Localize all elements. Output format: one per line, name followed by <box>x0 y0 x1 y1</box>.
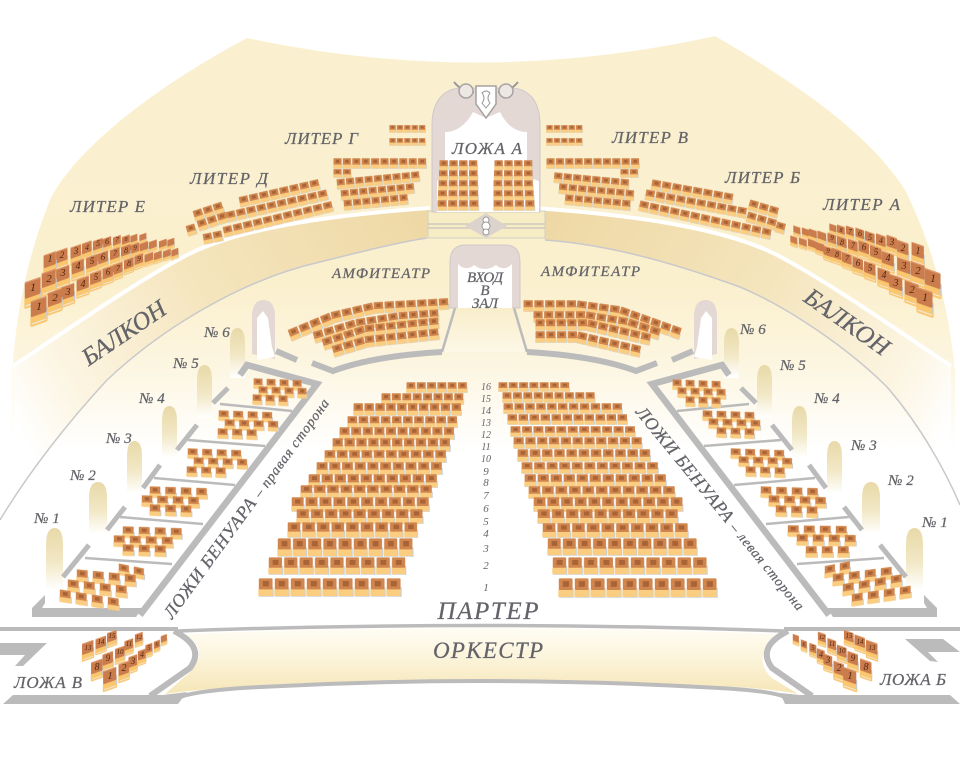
Liter E seat numbers: 6 <box>101 252 106 262</box>
box V seat numbers: 6 <box>156 642 158 648</box>
box V seat numbers: 10 <box>116 648 124 656</box>
Liter A seat numbers: 2 <box>909 284 915 296</box>
label: balcony right: БАЛКОН <box>798 283 896 363</box>
label: box V: ЛОЖА В <box>13 673 83 692</box>
box B seat numbers: 1 <box>847 670 853 682</box>
Liter A seat numbers: 4 <box>882 270 886 281</box>
box V seat numbers: 4 <box>140 650 144 659</box>
Liter E seat numbers: 7 <box>115 236 119 244</box>
benoir box seats left <box>59 378 310 612</box>
main cream hall background <box>12 36 955 450</box>
Liter A seat numbers: 7 <box>848 228 852 236</box>
Liter E seat numbers: 7 <box>116 264 121 273</box>
parterre row numbers: 7 <box>483 490 489 502</box>
box numbers right <box>739 322 948 531</box>
box A seats <box>437 160 535 211</box>
Liter E seat numbers: 3 <box>73 246 79 256</box>
box B seat numbers: 10 <box>838 647 846 655</box>
balcony band left <box>13 208 430 490</box>
Liter E seat numbers: 6 <box>106 267 111 277</box>
label: entrance: В <box>480 283 490 299</box>
Liter E seat numbers: 8 <box>124 246 128 255</box>
parterre row numbers: 11 <box>481 442 491 453</box>
amphitheatre seats right <box>523 300 683 358</box>
label: entrance: ВХОД <box>467 270 504 286</box>
box numbers right: № 5 <box>779 358 806 374</box>
Liter E seat numbers: 5 <box>96 239 100 248</box>
box B seat numbers: 15 <box>846 632 853 640</box>
Liter A seat numbers: 6 <box>862 242 867 252</box>
parterre row numbers: 5 <box>483 516 489 528</box>
ornamental panel <box>428 211 545 238</box>
balcony inner arc left <box>0 238 427 520</box>
label: balcony left: БАЛКОН <box>76 294 173 372</box>
Liter A seat numbers: 8 <box>835 250 839 259</box>
parterre row numbers: 8 <box>483 477 489 489</box>
Liter E seat numbers: 6 <box>105 237 109 246</box>
label: Liter G: ЛИТЕР Г <box>284 129 359 148</box>
Liter E seat numbers: 5 <box>94 272 99 282</box>
label: entrance <box>467 270 504 312</box>
parterre row numbers: 1 <box>483 582 489 594</box>
Liter A seat numbers <box>826 228 936 304</box>
Liter E seat numbers: 2 <box>46 273 52 285</box>
benoir box seats right <box>672 379 915 607</box>
box numbers left: № 2 <box>69 468 96 484</box>
box B seat numbers: 8 <box>864 662 868 673</box>
label: orchestra: ОРКЕСТР <box>433 638 543 663</box>
box B frame <box>767 629 960 704</box>
label: box B: ЛОЖА Б <box>879 670 946 689</box>
upper tier seats: Liter V <box>546 125 640 211</box>
box B seat numbers: 12 <box>819 635 825 641</box>
Liter A seat numbers: 3 <box>889 237 895 247</box>
box numbers right: № 4 <box>813 391 840 407</box>
upper tier seats: Liter G <box>333 125 427 211</box>
Liter A seat numbers: 6 <box>858 229 862 238</box>
Liter A seat numbers: 7 <box>851 241 856 250</box>
orchestra pit <box>165 626 798 697</box>
Liter A seats <box>790 223 942 319</box>
Liter A seat numbers: 1 <box>916 246 920 257</box>
Liter E seat numbers: 1 <box>30 280 36 294</box>
Liter E seats <box>24 232 179 328</box>
box V seat numbers: 8 <box>94 662 100 673</box>
balcony white rail left <box>13 208 430 366</box>
label: benoir boxes left-hand side: ЛОЖИ БЕНУАРА – левая сторона <box>631 401 810 614</box>
Liter A seat numbers: 5 <box>868 263 873 273</box>
ornament: box A crest <box>454 82 518 118</box>
parterre seats right <box>498 382 718 598</box>
box numbers right: № 3 <box>850 438 877 454</box>
Liter E seat numbers: 2 <box>52 292 58 304</box>
box numbers left: № 5 <box>172 356 199 372</box>
box B seat numbers: 6 <box>802 642 806 648</box>
Liter E seat numbers: 8 <box>127 259 131 268</box>
grey walls and box pillars, left side <box>32 300 455 617</box>
Liter A seat numbers: 8 <box>840 228 842 234</box>
box V frame <box>0 629 195 704</box>
Liter A seat numbers: 1 <box>922 290 928 304</box>
box numbers left: № 1 <box>33 511 60 527</box>
Liter E seat numbers: 3 <box>60 268 66 279</box>
Liter E seat numbers: 2 <box>60 250 65 260</box>
box numbers left <box>33 325 230 527</box>
box V seat numbers: 14 <box>98 638 105 646</box>
box V seats <box>82 629 168 693</box>
Liter A seat numbers: 9 <box>826 247 830 255</box>
box V seat numbers: 12 <box>136 635 142 641</box>
label: Liter D: ЛИТЕР Д <box>189 169 269 188</box>
Liter A seat numbers: 4 <box>879 236 883 245</box>
Liter A seat numbers: 3 <box>900 261 906 272</box>
Liter E seat numbers: 4 <box>80 279 86 290</box>
label: benoir boxes right-hand side: ЛОЖИ БЕНУАРА – правая сторона <box>159 394 333 623</box>
box V seat numbers: 3 <box>130 656 136 666</box>
Liter E seat numbers: 3 <box>64 287 70 298</box>
label: Liter V: ЛИТЕР В <box>611 128 689 147</box>
box B seat numbers: 9 <box>851 653 856 663</box>
parterre row numbers: 13 <box>481 418 491 429</box>
box V seat numbers: 15 <box>108 632 116 640</box>
parterre row numbers: 2 <box>483 560 489 572</box>
label: box A: ЛОЖА А <box>451 139 523 158</box>
box V seat numbers: 13 <box>84 644 92 652</box>
wall strips <box>63 388 228 577</box>
balcony inner arc right <box>545 240 960 505</box>
box B seat numbers: 4 <box>819 650 823 659</box>
small arch <box>252 300 275 359</box>
box B seat numbers <box>802 632 876 682</box>
Liter A seat numbers: 6 <box>856 258 861 268</box>
label: parterre: ПАРТЕР <box>436 598 538 625</box>
parterre row numbers <box>481 382 491 594</box>
box numbers left: № 4 <box>138 391 165 407</box>
Liter A seat numbers: 1 <box>930 271 936 285</box>
box B seats <box>792 629 878 693</box>
Liter E seat numbers: 7 <box>113 249 118 258</box>
label: amphitheatre right: АМФИТЕАТР <box>540 264 640 280</box>
box V seat numbers: 1 <box>107 670 113 682</box>
box numbers left: № 6 <box>203 325 230 341</box>
Liter E seat numbers: 4 <box>76 261 80 272</box>
Liter A seat numbers: 9 <box>830 234 834 242</box>
box numbers left: № 3 <box>105 431 132 447</box>
label: Liter A: ЛИТЕР А <box>822 195 901 214</box>
box numbers right: № 2 <box>887 473 914 489</box>
Liter E seat numbers: 1 <box>48 254 52 265</box>
box V seat numbers: 9 <box>106 653 111 663</box>
Liter E seat numbers: 1 <box>36 299 42 313</box>
entrance arch <box>442 245 527 352</box>
box B seat numbers: 5 <box>811 644 815 652</box>
label: Liter E: ЛИТЕР Е <box>69 197 146 216</box>
Liter E seat numbers: 9 <box>133 244 137 252</box>
Liter E seat numbers: 8 <box>124 237 128 243</box>
parterre row numbers: 15 <box>481 394 491 405</box>
amphitheatre seats left <box>287 298 450 358</box>
upper tier seats: Liter B <box>638 179 787 240</box>
balcony white rail right <box>534 208 951 366</box>
box B seat numbers: 13 <box>868 644 876 652</box>
box numbers right: № 6 <box>739 322 766 338</box>
Liter E seat numbers: 9 <box>137 255 141 263</box>
parterre seats left <box>258 382 468 597</box>
Liter A seat numbers: 2 <box>915 265 921 277</box>
Liter E seat numbers: 4 <box>85 243 89 252</box>
upper tier seats: Liter D <box>185 179 334 245</box>
box pillars <box>46 328 245 590</box>
label: amphitheatre left: АМФИТЕАТР <box>331 266 430 282</box>
parterre row numbers: 3 <box>482 543 489 555</box>
Liter A seat numbers: 3 <box>892 278 898 289</box>
parterre row numbers: 9 <box>483 466 489 478</box>
Liter A seat numbers: 5 <box>868 233 872 242</box>
box B seat numbers: 11 <box>829 640 835 648</box>
Liter A seat numbers: 5 <box>874 247 879 257</box>
Liter E seat numbers: 5 <box>90 256 95 266</box>
balcony band right <box>534 208 951 490</box>
box V seat numbers <box>84 632 158 682</box>
parterre row numbers: 14 <box>481 406 491 417</box>
Liter A seat numbers: 7 <box>845 254 850 263</box>
grey walls and box pillars, right side <box>514 300 937 617</box>
label: Liter B: ЛИТЕР Б <box>724 168 800 187</box>
box V seat numbers: 11 <box>126 640 132 648</box>
box V seat numbers: 5 <box>147 644 151 652</box>
Liter A seat numbers: 8 <box>840 238 844 247</box>
box V seat numbers: 2 <box>122 663 126 674</box>
parterre row numbers: 6 <box>483 503 489 515</box>
Liter A seat numbers: 2 <box>901 243 906 253</box>
label: entrance: ЗАЛ <box>472 296 499 312</box>
Liter E seat numbers <box>30 236 141 313</box>
parterre row numbers: 4 <box>483 528 489 540</box>
box numbers right: № 1 <box>921 515 948 531</box>
box A arch <box>432 82 540 212</box>
box B seat numbers: 14 <box>856 638 864 646</box>
Liter A seat numbers: 4 <box>886 253 890 264</box>
box B seat numbers: 2 <box>836 663 842 674</box>
parterre row numbers: 10 <box>481 454 491 465</box>
parterre row numbers: 12 <box>481 430 491 441</box>
parterre row numbers: 16 <box>481 382 491 393</box>
box B seat numbers: 3 <box>825 655 831 665</box>
